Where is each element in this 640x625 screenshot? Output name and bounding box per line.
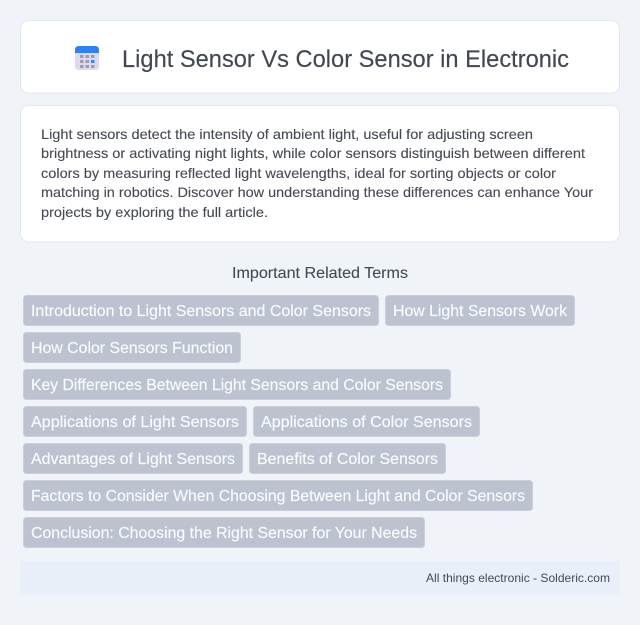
title: Light Sensor Vs Color Sensor in Electronic xyxy=(122,46,569,73)
tag: Conclusion: Choosing the Right Sensor for Your Needs xyxy=(31,525,417,542)
tag xyxy=(24,370,450,400)
text block: description: brightness or activating night lights, while color sensors distinguish between different xyxy=(41,145,585,161)
tag xyxy=(24,296,378,326)
panel: header xyxy=(20,20,620,93)
tag: Key Differences Between Light Sensors and Color Sensors xyxy=(31,377,443,394)
tag xyxy=(386,296,574,326)
tag: Applications of Color Sensors xyxy=(261,414,472,431)
text block: description: projects by exploring the full article. xyxy=(41,204,268,220)
tag: Applications of Light Sensors xyxy=(31,414,239,431)
footer xyxy=(20,561,620,595)
heading: related terms: Important Related Terms xyxy=(232,265,408,282)
text block: description xyxy=(41,126,593,220)
text block: description: Light sensors detect the intensity of ambient light, useful for adjusting screen xyxy=(41,126,533,142)
tag: Advantages of Light Sensors xyxy=(31,451,235,468)
tag xyxy=(254,406,480,436)
text block: description: colors by measuring reflected light wavelengths, ideal for sorting objects or color xyxy=(41,165,556,181)
tag xyxy=(24,332,240,362)
tag xyxy=(250,444,446,474)
tag xyxy=(24,518,424,548)
tag xyxy=(24,444,242,474)
tag xyxy=(24,406,246,436)
tag: How Color Sensors Function xyxy=(31,340,233,357)
panel: intro text xyxy=(20,106,620,242)
icon: calendar xyxy=(75,46,99,70)
text block: description: matching in robotics. Discover how understanding these differences can enhance Your xyxy=(41,184,593,200)
panel: term tags xyxy=(24,296,574,548)
tag: How Light Sensors Work xyxy=(393,303,568,320)
footer: All things electronic - Solderic.com xyxy=(426,571,610,585)
tag: Introduction to Light Sensors and Color Sensors xyxy=(31,303,371,320)
tag: Benefits of Color Sensors xyxy=(257,451,438,468)
tag xyxy=(24,480,532,510)
tag: Factors to Consider When Choosing Between Light and Color Sensors xyxy=(31,488,525,505)
